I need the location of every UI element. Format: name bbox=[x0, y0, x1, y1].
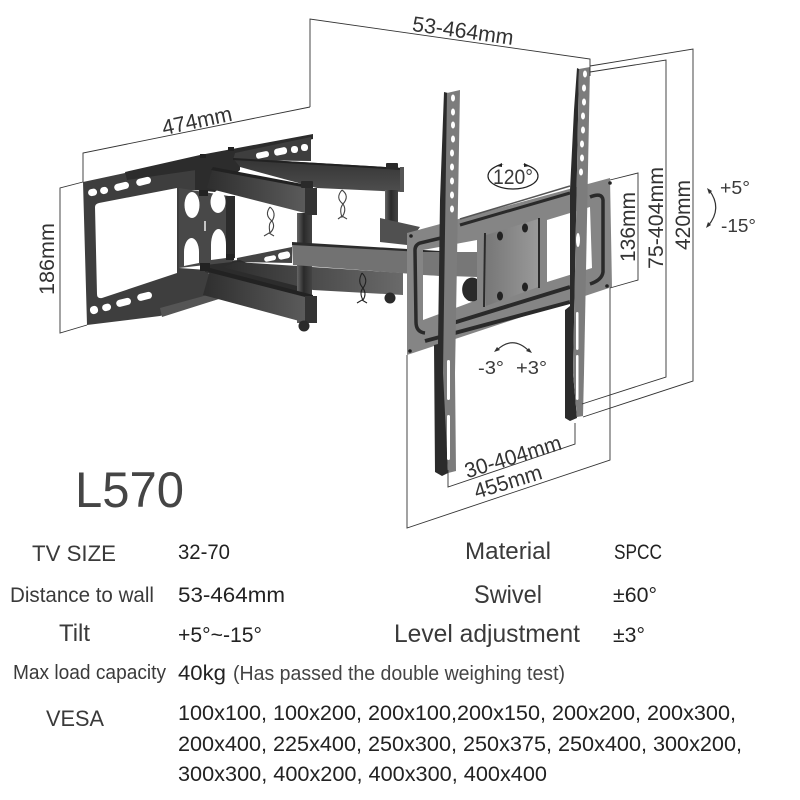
tilt arc and labels: -15° bbox=[721, 216, 756, 236]
dimension lines bbox=[60, 19, 693, 528]
dimension labels: 474mm bbox=[160, 102, 234, 140]
dimension labels: 53-464mm bbox=[411, 12, 515, 50]
dimension: 30-404mm lines bbox=[448, 423, 575, 487]
row: distance to wall: Distance to wall bbox=[10, 584, 154, 607]
row: max load capacity bbox=[13, 662, 565, 685]
arm behind window bbox=[423, 252, 477, 277]
rear upper arm bbox=[233, 158, 403, 192]
row: VESA: 200x400, 225x400, 250x300, 250x375, 250x400, 300x200, bbox=[178, 733, 742, 756]
wall plate center with holes bbox=[179, 188, 235, 268]
rear lower arm bbox=[222, 262, 403, 295]
dimension: 455mm lines bbox=[407, 288, 610, 528]
row: material: SPCC bbox=[614, 541, 662, 564]
cable ties bbox=[264, 190, 367, 303]
row: VESA: 300x300, 400x200, 400x300, 400x400 bbox=[178, 763, 547, 786]
row: material: Material bbox=[465, 538, 551, 565]
row: tilt: Tilt bbox=[59, 620, 90, 647]
dimension labels: 75-404mm bbox=[644, 167, 668, 269]
row: tilt: +5°~-15° bbox=[178, 624, 262, 647]
level adjustment arc and labels: -3° bbox=[478, 358, 504, 378]
VESA holes bbox=[408, 181, 612, 353]
dimension: 186mm lines bbox=[60, 182, 87, 333]
row: swivel: Swivel bbox=[474, 581, 542, 609]
row: tilt bbox=[59, 620, 262, 647]
dimension: 420mm lines bbox=[583, 49, 693, 417]
row: material bbox=[465, 538, 662, 565]
row: swivel: ±60° bbox=[613, 584, 657, 607]
row: level adjustment: ±3° bbox=[613, 624, 645, 647]
wall plate slots bbox=[87, 144, 308, 315]
row: max load capacity: Max load capacity bbox=[13, 662, 166, 684]
row: max load capacity: 40kg bbox=[178, 662, 226, 685]
swing arms bbox=[203, 158, 440, 332]
swivel 120 degree badge: 120° bbox=[493, 166, 533, 189]
row: TV size bbox=[32, 541, 230, 566]
dimension labels: 455mm bbox=[471, 460, 545, 504]
pivot column, plate side bbox=[385, 190, 398, 222]
upper right strip bbox=[233, 137, 311, 161]
row: VESA: 100x100, 100x200, 200x100,200x150, 200x200, 200x300, bbox=[178, 702, 736, 725]
plate shadow behind upper arm bbox=[195, 152, 240, 192]
lower rear strip bbox=[237, 247, 292, 263]
row: VESA bbox=[46, 702, 742, 786]
row: level adjustment: Level adjustment bbox=[394, 620, 580, 648]
row: TV size: TV SIZE bbox=[32, 541, 116, 566]
tilt arc and labels: +5° bbox=[720, 178, 750, 198]
dimension: 53-464mm lines bbox=[310, 19, 590, 107]
upper inner arm bbox=[207, 167, 317, 215]
tilt arc and labels bbox=[706, 178, 756, 236]
TV plate bbox=[407, 178, 612, 355]
left vertical rail bbox=[434, 90, 460, 476]
spec table bbox=[10, 538, 742, 786]
row: distance to wall bbox=[10, 584, 285, 607]
front lower arm bbox=[292, 243, 440, 276]
row: TV size: 32-70 bbox=[178, 541, 230, 564]
level adjustment arc and labels bbox=[478, 343, 547, 378]
row: VESA: VESA bbox=[46, 706, 104, 731]
row: distance to wall: 53-464mm bbox=[178, 584, 285, 607]
row: swivel bbox=[474, 581, 657, 609]
plate bolts bbox=[199, 147, 234, 271]
level adjustment arc and labels: +3° bbox=[516, 358, 547, 378]
dimension labels: 186mm bbox=[35, 223, 59, 295]
dimension: 75-404mm lines bbox=[582, 60, 666, 404]
row: max load capacity: (Has passed the double weighing test) bbox=[233, 663, 565, 685]
lower flange bbox=[160, 291, 222, 317]
pivot column, wall side bbox=[297, 213, 312, 323]
dimension labels: 30-404mm bbox=[462, 431, 564, 483]
model name: L570 bbox=[75, 462, 184, 518]
dimension labels: 136mm bbox=[616, 192, 640, 262]
right vertical rail bbox=[565, 67, 590, 421]
knuckle bbox=[380, 218, 420, 245]
plate shadow behind lower arm bbox=[205, 260, 300, 295]
wall plate bbox=[83, 134, 313, 325]
dimension: 474mm lines bbox=[83, 107, 310, 182]
bolts bbox=[298, 163, 398, 332]
dimension: 136mm lines bbox=[610, 173, 638, 288]
center panel bbox=[486, 219, 538, 306]
plate rails and frame bbox=[415, 186, 603, 341]
lower inner arm bbox=[203, 270, 317, 323]
dimension labels: 420mm bbox=[671, 180, 695, 250]
dimension labels bbox=[35, 12, 695, 504]
